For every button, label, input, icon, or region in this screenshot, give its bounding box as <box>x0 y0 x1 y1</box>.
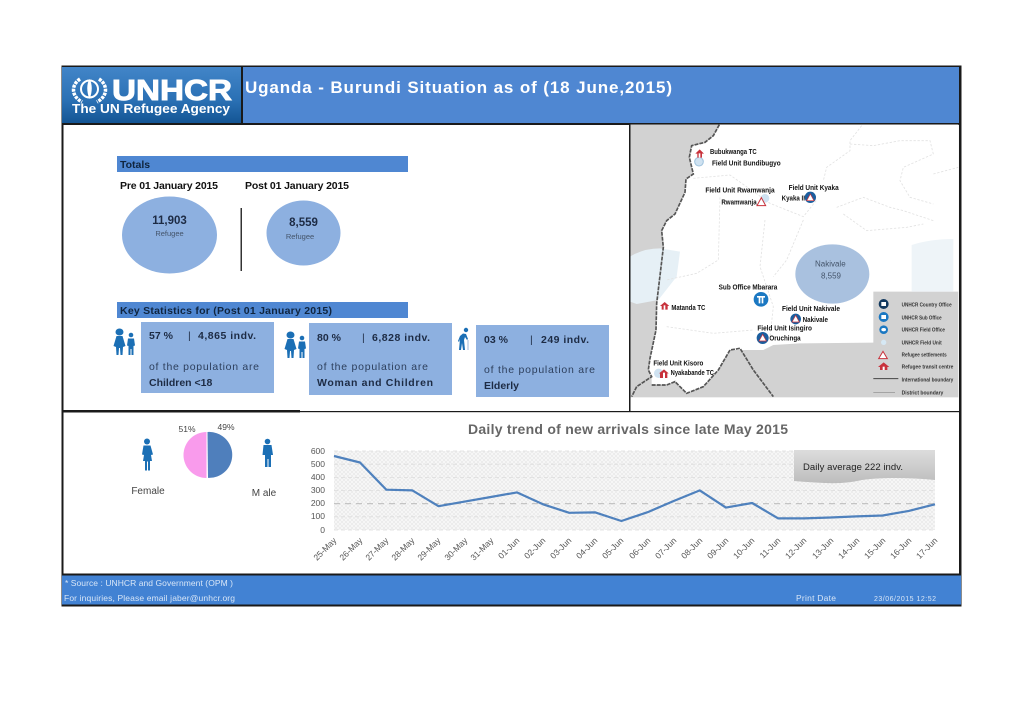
stat card: elderly: of the population are <box>484 364 595 376</box>
stat card: women and children: Woman and Children <box>317 377 433 389</box>
map labels: Rwamwanja <box>721 197 757 206</box>
stat card: children <box>141 322 274 393</box>
map legend: UNHCR Field Unit <box>902 340 942 346</box>
map labels: Field Unit Rwamwanja <box>705 185 775 194</box>
stat card: women and children: of the population are <box>317 361 428 373</box>
header banner <box>62 66 961 125</box>
Uganda land area <box>648 125 958 393</box>
x axis labels: 01-Jun <box>496 535 522 561</box>
map labels: Bubukwanga TC <box>710 147 757 156</box>
UNHCR logo: The UN Refugee Agency <box>72 102 230 116</box>
stat card: children: 57 % <box>149 330 174 342</box>
x axis labels: 25-May <box>311 535 339 562</box>
map labels: Matanda TC <box>671 303 706 312</box>
callout: daily average <box>794 450 935 483</box>
map legend: Refugee transit centre <box>902 365 953 371</box>
x axis labels: 31-May <box>468 535 496 562</box>
print date: Print Date <box>796 593 836 603</box>
x axis labels: 06-Jun <box>627 535 653 561</box>
pre 2015 label: Pre 01 January 2015 <box>120 180 218 192</box>
y axis labels: 600 <box>311 446 325 456</box>
x axis labels: 15-Jun <box>862 535 888 561</box>
stat card: elderly: Elderly <box>484 380 519 392</box>
x axis labels: 11-Jun <box>757 535 783 560</box>
male label: M ale <box>252 488 277 499</box>
x axis labels: 26-May <box>337 535 365 562</box>
footer banner <box>62 574 961 606</box>
icon: male <box>262 439 273 467</box>
map labels: Oruchinga <box>769 334 801 343</box>
x axis labels: 29-May <box>415 535 443 562</box>
stat card: children: | <box>188 330 191 342</box>
bubble: Nakivale 8,559: Nakivale <box>815 260 846 269</box>
x axis labels: 02-Jun <box>522 535 548 561</box>
map labels: Nyakabande TC <box>671 368 714 377</box>
page frame <box>62 66 960 606</box>
map labels <box>653 147 840 377</box>
bubble: Nakivale 8,559: 8,559 <box>821 272 842 281</box>
inquiries note: For inquiries, Please email jaber@unhcr.org <box>64 593 235 603</box>
map legend: UNHCR Sub Office <box>902 315 942 321</box>
bubble: post 2015 refugees: Refugee <box>286 232 314 241</box>
post 2015 label: Post 01 January 2015 <box>245 180 349 192</box>
key statistics heading <box>117 302 408 318</box>
stat card: elderly: | <box>530 334 533 346</box>
map labels: Kyaka II <box>782 194 805 203</box>
map labels: Nakivale <box>803 315 828 324</box>
map labels: Field Unit Kyaka <box>789 183 839 192</box>
source note: * Source : UNHCR and Government (OPM ) <box>65 578 233 588</box>
panel: gender breakdown <box>131 422 277 499</box>
x axis labels: 17-Jun <box>914 535 940 561</box>
y axis labels: 0 <box>320 525 325 535</box>
x axis labels: 04-Jun <box>574 535 600 561</box>
map legend: District boundary <box>902 390 944 396</box>
bubble: pre 2015 refugees: Refugee <box>155 229 184 238</box>
y axis labels: 500 <box>311 459 325 469</box>
x axis labels: 12-Jun <box>783 535 809 561</box>
map labels: Field Unit Isingiro <box>757 324 812 333</box>
map legend: International boundary <box>902 378 954 384</box>
totals heading: Totals <box>120 159 150 171</box>
y axis labels: 300 <box>311 485 325 495</box>
map legend: UNHCR Country Office <box>902 302 952 308</box>
international boundary <box>632 125 773 397</box>
section dividers <box>62 66 961 606</box>
female label: Female <box>131 486 165 497</box>
title: Uganda - Burundi Situation as of (18 June,2015) <box>245 78 672 97</box>
stat card: women and children: 6,828 indv. <box>372 332 430 344</box>
bubble: pre 2015 refugees <box>122 196 217 274</box>
map legend <box>873 299 954 396</box>
chart title: Daily trend of new arrivals since late May 2015 <box>468 421 788 437</box>
UNHCR logo: UNHCR <box>112 75 232 107</box>
panel: totals <box>117 156 408 274</box>
plot area <box>334 451 935 530</box>
divider <box>240 208 242 271</box>
stat card: elderly: 03 % <box>484 334 509 346</box>
map labels: Sub Office Mbarara <box>719 282 778 291</box>
district boundaries <box>667 126 958 337</box>
stat card: children: of the population are <box>149 361 259 373</box>
x axis labels: 14-Jun <box>836 535 862 561</box>
stat card: children: 4,865 indv. <box>198 330 256 342</box>
y axis labels <box>311 446 325 535</box>
x axis labels: 09-Jun <box>705 535 731 561</box>
panel: key statistics <box>114 302 609 397</box>
icon: female <box>142 438 153 470</box>
panel: map <box>630 125 958 413</box>
stat card: elderly: 249 indv. <box>541 334 589 346</box>
key statistics heading: Key Statistics for (Post 01 January 2015) <box>120 305 332 317</box>
stat card: women and children: | <box>362 332 365 344</box>
map markers <box>654 149 816 378</box>
bubble: post 2015 refugees <box>266 200 340 266</box>
stat card: elderly <box>476 325 609 397</box>
x axis labels: 16-Jun <box>888 535 914 561</box>
chart: daily trend of new arrivals <box>311 421 940 562</box>
bubble: Nakivale 8,559 <box>795 244 869 304</box>
map legend: Refugee settlements <box>902 352 947 358</box>
y axis labels: 100 <box>311 511 325 521</box>
icon: elderly person <box>458 328 468 350</box>
UNHCR logo <box>62 67 242 123</box>
neighbouring countries <box>630 125 958 397</box>
y axis labels: 200 <box>311 498 325 508</box>
map labels: Field Unit Nakivale <box>782 304 840 313</box>
map labels: Field Unit Kisoro <box>653 358 704 367</box>
print timestamp: 23/06/2015 12:52 <box>874 596 936 603</box>
x axis labels: 05-Jun <box>600 535 626 561</box>
y axis labels: 400 <box>311 472 325 482</box>
x axis labels <box>311 535 940 562</box>
map labels: Field Unit Bundibugyo <box>712 158 781 167</box>
map legend: UNHCR Field Office <box>902 328 945 334</box>
pie chart: gender split: 51% <box>178 424 196 434</box>
x axis labels: 07-Jun <box>653 535 679 561</box>
x axis labels: 13-Jun <box>810 535 836 561</box>
trend line <box>334 456 935 521</box>
x axis labels: 03-Jun <box>548 535 574 561</box>
lake and neighbouring water <box>630 248 680 304</box>
x axis labels: 28-May <box>389 535 417 562</box>
stat card: women and children: 80 % <box>317 332 342 344</box>
totals heading <box>117 156 408 172</box>
icon: woman and child <box>284 332 306 358</box>
stat card: children: Children <18 <box>149 377 212 389</box>
x axis labels: 27-May <box>363 535 391 562</box>
x axis labels: 08-Jun <box>679 535 705 561</box>
bubble: pre 2015 refugees: 11,903 <box>152 215 187 227</box>
callout: daily average: Daily average 222 indv. <box>803 462 903 473</box>
bubble: post 2015 refugees: 8,559 <box>289 217 318 229</box>
pie chart: gender split: 49% <box>217 422 235 432</box>
icon: mother and child <box>114 328 135 355</box>
stat card: women and children <box>309 323 452 395</box>
pie chart: gender split <box>178 422 235 478</box>
x axis labels: 10-Jun <box>731 535 757 561</box>
x axis labels: 30-May <box>442 535 470 562</box>
